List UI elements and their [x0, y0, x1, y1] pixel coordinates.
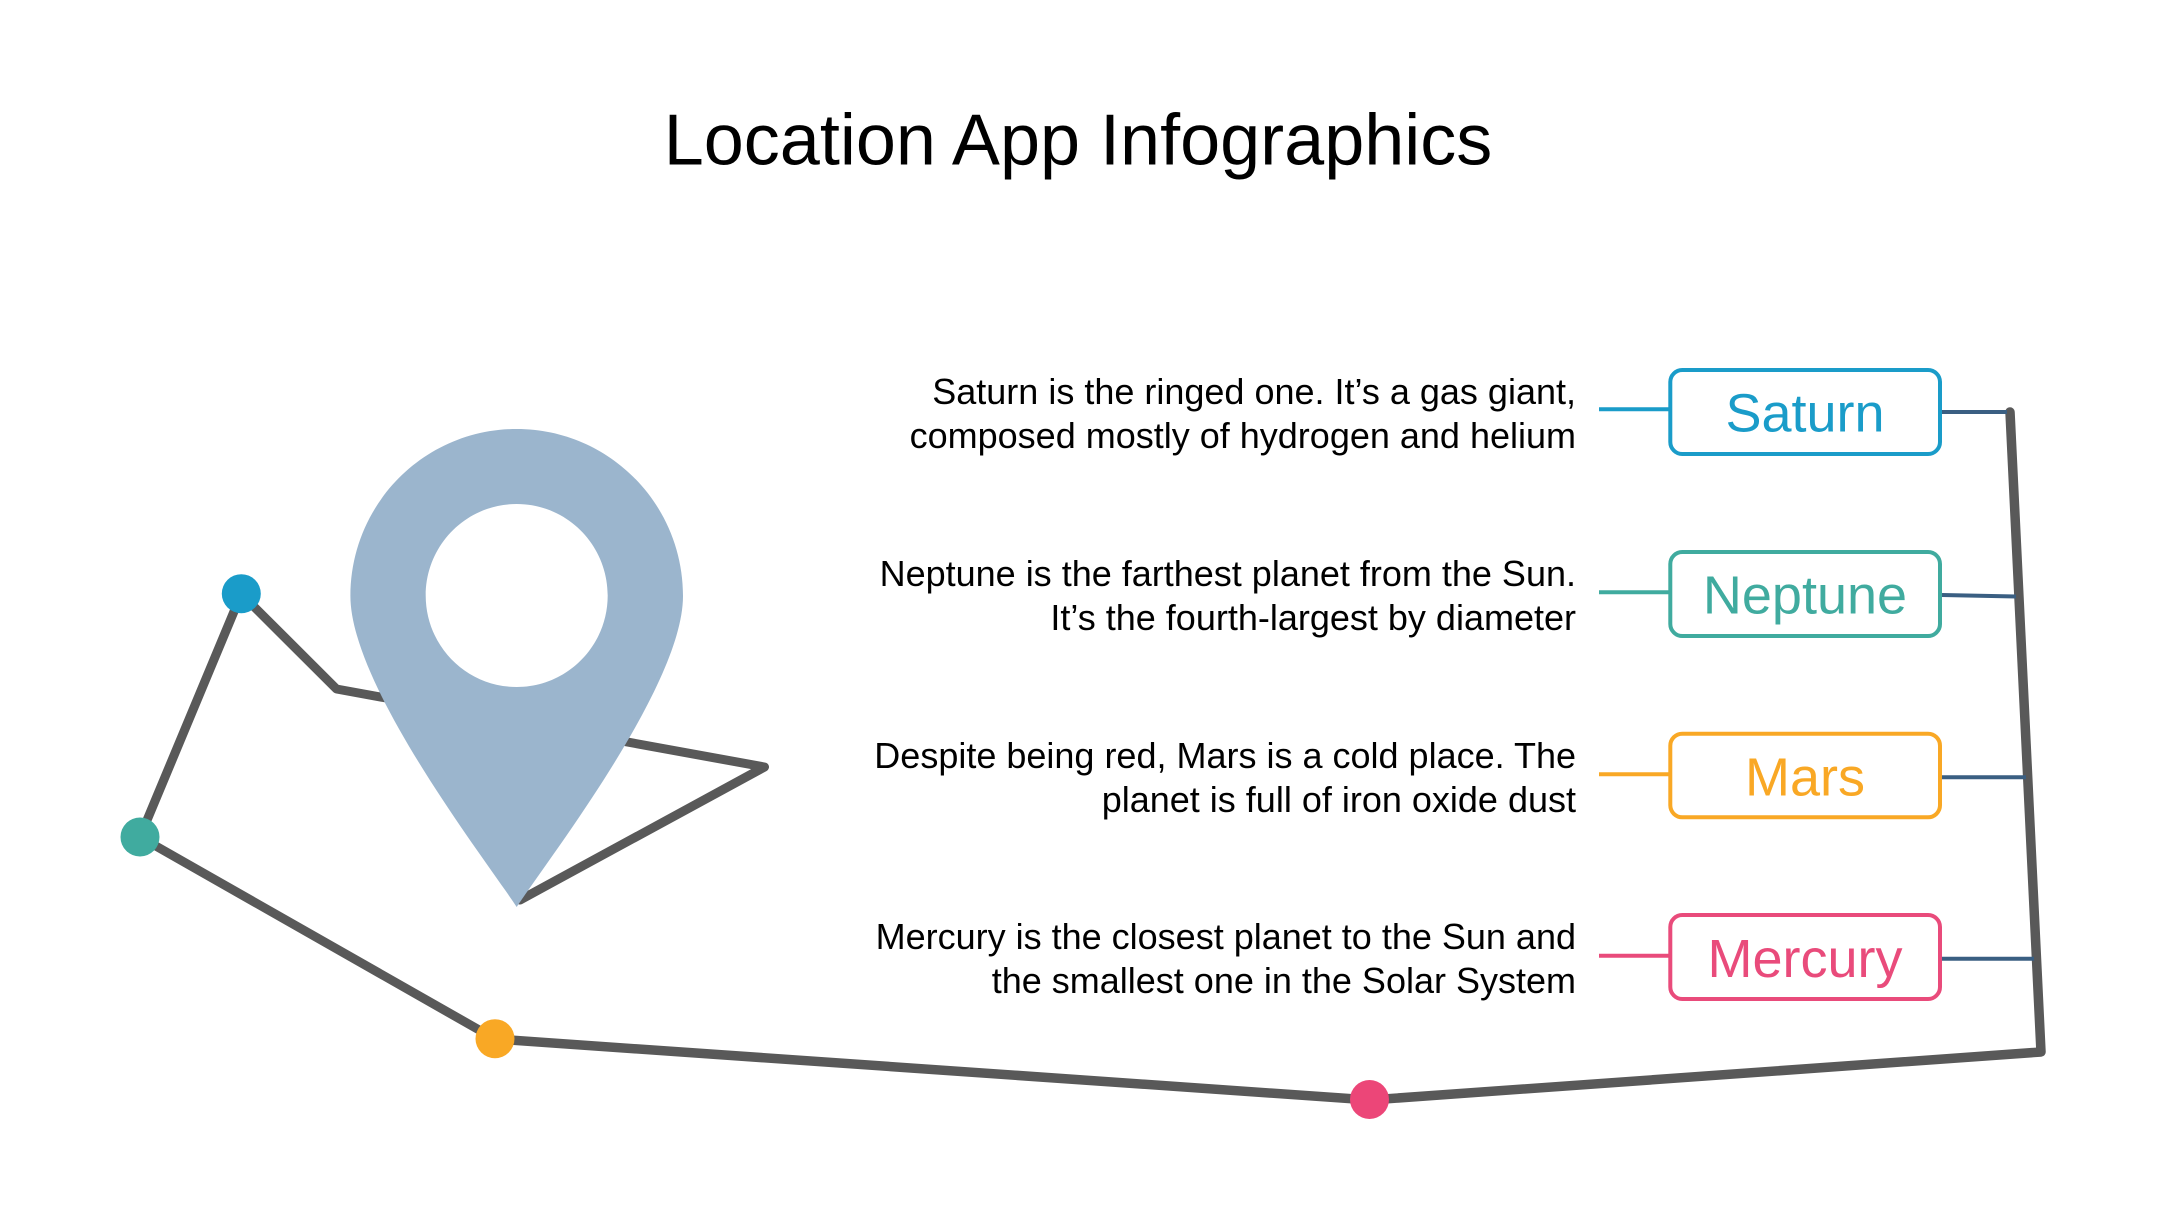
Saturn label box	[1670, 370, 1940, 454]
Mercury description: Mercury is the closest planet to the Sun and	[876, 916, 1576, 957]
Mercury label: Mercury	[1707, 929, 1903, 989]
waypoint dot: teal	[120, 818, 160, 856]
right connectors	[1942, 412, 2034, 959]
title: Location App Infographics	[664, 100, 1492, 180]
Mars description: planet is full of iron oxide dust	[1102, 779, 1576, 820]
Mars connector	[1599, 772, 1669, 776]
Neptune description: Neptune is the farthest planet from the Sun.	[880, 553, 1576, 594]
Mercury description: the smallest one in the Solar System	[992, 960, 1576, 1001]
Mars label box	[1670, 734, 1940, 817]
location pin icon	[350, 429, 683, 907]
Mercury connector	[1599, 954, 1669, 958]
waypoint dot: blue	[222, 574, 261, 613]
Mercury label box	[1670, 915, 1940, 999]
Saturn description: Saturn is the ringed one. It’s a gas giant,	[932, 371, 1576, 412]
waypoint dot: pink	[1350, 1080, 1389, 1119]
Mars description: Despite being red, Mars is a cold place. The	[874, 735, 1576, 776]
Saturn row	[910, 370, 1940, 456]
Neptune connector	[1599, 590, 1669, 594]
Mars row	[874, 734, 1940, 820]
Mercury row	[876, 915, 1940, 1001]
Neptune row	[880, 552, 1940, 638]
Saturn connector	[1599, 407, 1669, 411]
Saturn description: composed mostly of hydrogen and helium	[910, 415, 1576, 456]
Neptune description: It’s the fourth-largest by diameter	[1050, 597, 1576, 638]
Saturn label: Saturn	[1725, 384, 1885, 444]
waypoint dot: orange	[476, 1019, 514, 1058]
route line	[140, 412, 2041, 1100]
Neptune label: Neptune	[1703, 565, 1907, 625]
Neptune label box	[1670, 552, 1940, 636]
Mars label: Mars	[1745, 747, 1865, 807]
